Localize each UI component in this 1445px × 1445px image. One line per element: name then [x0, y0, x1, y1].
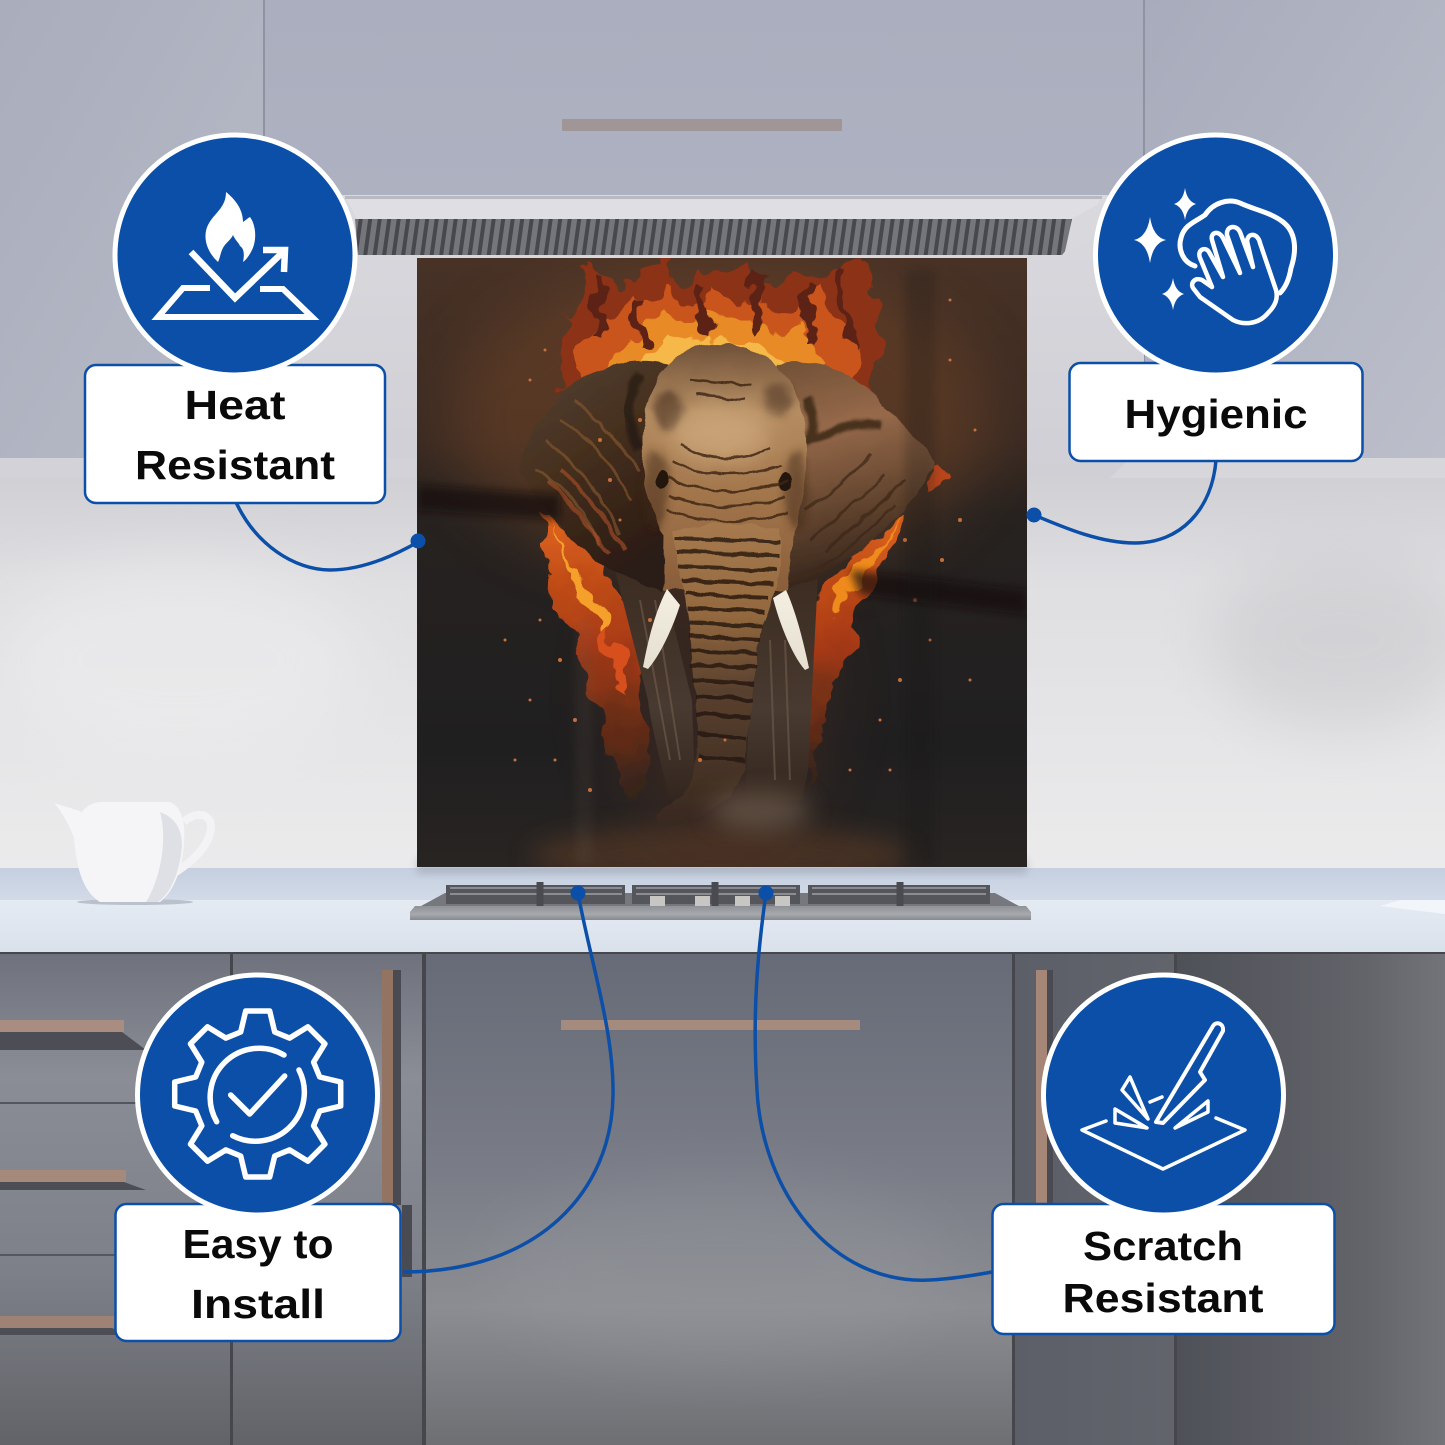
- countertop: [0, 868, 1445, 952]
- embers: [504, 298, 976, 792]
- callout connector: heat resistant: [235, 500, 426, 570]
- lower cabinets: [0, 952, 1445, 1445]
- upper center cabinet: [265, 0, 1143, 195]
- flames top: [559, 258, 879, 403]
- label box: easy to install: Easy to: [182, 1221, 334, 1267]
- badge: heat: [115, 135, 355, 375]
- icon: flame on surface: [158, 192, 312, 317]
- label box: heat resistant: [85, 365, 385, 503]
- icon: hand wiping with sparkles: [1134, 188, 1295, 323]
- wall behind hood: [264, 195, 1144, 475]
- label box: easy to install: [116, 1204, 400, 1341]
- tiled wall: [0, 458, 1445, 870]
- label box: scratch resistant: [992, 1204, 1334, 1334]
- panel shadow: [417, 858, 1027, 874]
- glass reflections: [417, 270, 1027, 865]
- callout connector: scratch resistant: [755, 886, 992, 1280]
- label box: easy to install: Install: [191, 1281, 325, 1327]
- right tusk: [773, 590, 809, 670]
- badge: install: [138, 975, 378, 1215]
- upper right cabinet: [1145, 0, 1445, 458]
- label box: scratch resistant: Scratch: [1083, 1223, 1243, 1269]
- icon: gear with check: [175, 1011, 341, 1177]
- label box: scratch resistant: Resistant: [1062, 1275, 1264, 1321]
- left tusk: [643, 589, 680, 669]
- feature: easy to install: [116, 975, 400, 1341]
- label box: hygienic: [1070, 363, 1362, 461]
- elephant trunk: [656, 524, 781, 826]
- drawer handles: [0, 970, 1053, 1335]
- cabinet handle: [562, 119, 842, 131]
- teapot: [54, 802, 211, 905]
- upper left cabinet: [0, 0, 263, 458]
- badge: hygienic: [1096, 135, 1336, 375]
- label box: heat resistant: Resistant: [135, 442, 335, 488]
- elephant right ear: [774, 361, 934, 594]
- dust at feet: [710, 790, 810, 830]
- flames right: [802, 461, 955, 794]
- badge: scratch: [1044, 975, 1284, 1215]
- flames left: [540, 510, 650, 801]
- feature: hygienic: [1070, 135, 1362, 461]
- icon: knife scratching surface: [1082, 1023, 1245, 1169]
- elephant left ear: [522, 360, 668, 592]
- feature: scratch resistant: [992, 975, 1334, 1334]
- callout connector: easy to install: [403, 886, 613, 1272]
- elephant head: [641, 343, 808, 590]
- feature: heat resistant: [85, 135, 385, 503]
- callout connector: hygienic: [1026, 460, 1216, 543]
- label box: heat resistant: Heat: [184, 382, 286, 428]
- label box: hygienic: Hygienic: [1124, 391, 1308, 437]
- elephant glass splashback panel: [417, 258, 1027, 885]
- elephant legs: [615, 570, 818, 800]
- gas hob: [410, 882, 1031, 920]
- range hood: [345, 196, 1102, 256]
